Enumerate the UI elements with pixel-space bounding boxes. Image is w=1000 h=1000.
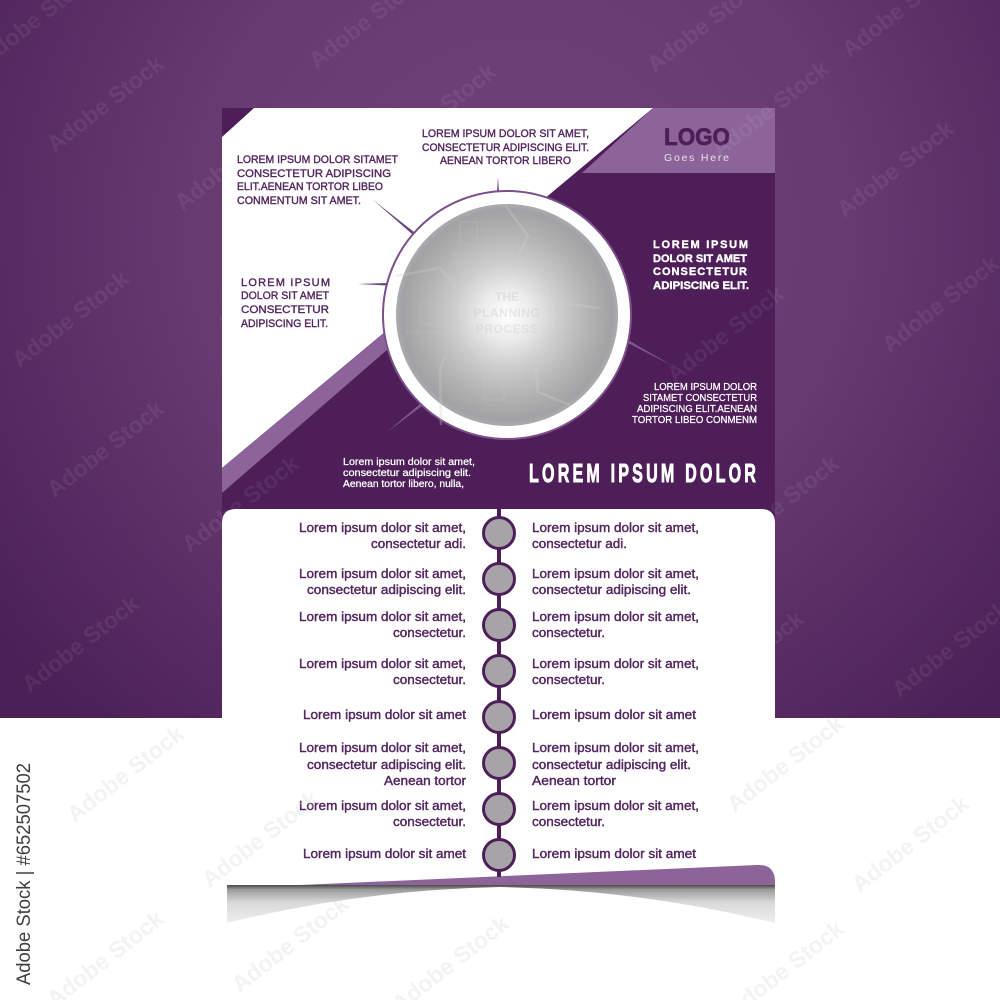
logo band xyxy=(582,108,775,173)
callout: right bold: ADIPISCING ELIT. xyxy=(653,280,749,292)
list: right column: Lorem ipsum dolor sit amet xyxy=(532,707,696,722)
callout: top centre: LOREM IPSUM DOLOR SIT AMET, xyxy=(422,128,589,140)
list: left column: Lorem ipsum dolor sit amet xyxy=(303,707,466,722)
list: right column: Lorem ipsum dolor sit amet, xyxy=(532,798,699,813)
white list panel xyxy=(222,509,775,885)
faint process diagram: MANAGEMENT xyxy=(451,259,491,265)
callout: top centre xyxy=(422,128,589,167)
list: left column: Lorem ipsum dolor sit amet, xyxy=(299,798,466,813)
stock watermark repeated: Adobe Stock xyxy=(832,115,959,222)
faint process diagram: ESTATE & LEGACY xyxy=(405,330,455,336)
light purple diagonal stripe xyxy=(222,328,395,493)
callout: lower centre: Aenean tortor libero, nulla, xyxy=(343,479,464,490)
list: left column: Lorem ipsum dolor sit amet, xyxy=(299,520,466,535)
callout: middle left: CONSECTETUR xyxy=(241,304,329,316)
stock watermark repeated: Adobe Stock xyxy=(722,710,849,817)
heading: LOREM IPSUM DOLOR xyxy=(529,458,756,488)
logo xyxy=(664,124,730,164)
stock watermark repeated: Adobe Stock xyxy=(877,250,1000,357)
stock watermark repeated: Adobe Stock xyxy=(662,280,789,387)
faint process diagram: INVESTMENT xyxy=(453,252,489,258)
callout: lower right: ADIPISCING ELIT.AENEAN xyxy=(637,404,757,415)
grey orb xyxy=(396,204,618,426)
list: left column: Lorem ipsum dolor sit amet xyxy=(303,846,466,861)
callout spokes xyxy=(358,177,673,432)
stock watermark repeated: Adobe Stock xyxy=(177,450,304,557)
stock watermark repeated: Adobe Stock xyxy=(707,55,834,162)
stock watermark repeated: Adobe Stock xyxy=(42,395,169,502)
list: left column xyxy=(299,520,467,861)
stock watermark repeated: Adobe Stock xyxy=(847,790,974,897)
callout: lower right: TORTOR LIBEO CONMENM xyxy=(632,415,757,426)
faint process diagram: THE xyxy=(495,290,519,304)
callout: lower centre xyxy=(343,457,475,490)
list: left column: Lorem ipsum dolor sit amet, xyxy=(299,609,466,624)
list: right column: consectetur. xyxy=(532,625,605,640)
list: right column xyxy=(532,520,699,861)
timeline xyxy=(484,509,514,877)
white diagonal area xyxy=(222,108,653,468)
list: right column: consectetur adipiscing elit. xyxy=(532,757,691,772)
list: right column: Lorem ipsum dolor sit amet xyxy=(532,846,696,861)
stock watermark repeated: Adobe Stock xyxy=(374,58,501,165)
central circle xyxy=(383,191,631,439)
list: right column: consectetur. xyxy=(532,814,605,829)
callout: lower centre: consectetur adipiscing elit. xyxy=(343,468,471,479)
list: left column: Lorem ipsum dolor sit amet, xyxy=(299,566,466,581)
stock watermark repeated: Adobe Stock xyxy=(62,720,189,827)
list: left column: consectetur adipiscing elit. xyxy=(307,757,466,772)
list: right column: Lorem ipsum dolor sit amet, xyxy=(532,520,699,535)
callout: right bold xyxy=(653,239,749,292)
callout: lower centre: Lorem ipsum dolor sit amet, xyxy=(343,457,475,468)
list: left column: consectetur adi. xyxy=(371,536,466,551)
callout: upper left xyxy=(237,154,398,207)
callout: lower right xyxy=(632,382,757,426)
timeline nodes xyxy=(484,518,514,870)
faint process diagram: PLANNING xyxy=(474,306,540,320)
list: left column: Aenean tortor xyxy=(384,773,467,788)
callout: right bold: DOLOR SIT AMET xyxy=(653,253,747,265)
callout: lower right: SITAMET CONSECTETUR xyxy=(643,393,757,404)
list: right column: Lorem ipsum dolor sit amet, xyxy=(532,656,699,671)
callout: upper left: CONSECTETUR ADIPISCING xyxy=(237,168,391,180)
bottom purple wedge xyxy=(300,865,775,885)
callout: upper left: ELIT.AENEAN TORTOR LIBEO xyxy=(237,181,383,193)
list: right column: Lorem ipsum dolor sit amet, xyxy=(532,609,699,624)
list: right column: Aenean tortor xyxy=(532,773,617,788)
stock watermark repeated: Adobe Stock xyxy=(42,50,169,157)
callout: upper left: LOREM IPSUM DOLOR SITAMET xyxy=(237,154,398,166)
drop shadow below flyer xyxy=(227,885,775,923)
stock watermark repeated: Adobe Stock xyxy=(170,108,297,215)
list: left column: consectetur. xyxy=(393,672,466,687)
stock watermark repeated: Adobe Stock xyxy=(227,890,354,997)
callout: lower right: LOREM IPSUM DOLOR xyxy=(654,382,757,393)
stock watermark repeated: Adobe Stock xyxy=(717,450,844,557)
logo: LOGO xyxy=(664,124,730,151)
list: left column: consectetur. xyxy=(393,625,466,640)
stock watermark repeated: Adobe Stock xyxy=(212,230,339,337)
list: right column: consectetur adipiscing elit. xyxy=(532,582,691,597)
callout: middle left: DOLOR SIT AMET xyxy=(241,290,329,302)
logo: Goes Here xyxy=(664,152,729,164)
stock watermark repeated: Adobe Stock xyxy=(17,590,144,697)
list: left column: Lorem ipsum dolor sit amet, xyxy=(299,656,466,671)
list: left column: Lorem ipsum dolor sit amet, xyxy=(299,740,466,755)
callout: top centre: AENEAN TORTOR LIBERO xyxy=(440,155,571,167)
faint process diagram: PROCESS xyxy=(476,322,538,336)
list: right column: consectetur. xyxy=(532,672,605,687)
flyer top panel xyxy=(222,108,775,528)
stock watermark repeated: Adobe Stock xyxy=(197,785,324,892)
list: right column: Lorem ipsum dolor sit amet, xyxy=(532,566,699,581)
stock watermark repeated: Adobe Stock xyxy=(7,265,134,372)
stock id side label: Adobe Stock | #652507502 xyxy=(14,763,35,985)
purple background band xyxy=(0,0,1000,718)
list: left column: consectetur. xyxy=(393,814,466,829)
callout: right bold: CONSECTETUR xyxy=(653,266,747,278)
list: left column: consectetur adipiscing elit. xyxy=(307,582,466,597)
list: right column: Lorem ipsum dolor sit amet, xyxy=(532,740,699,755)
faint process diagram xyxy=(396,205,600,425)
callout: top centre: CONSECTETUR ADIPISCING ELIT. xyxy=(422,142,589,154)
list: right column: consectetur adi. xyxy=(532,536,627,551)
callout: middle left: LOREM IPSUM xyxy=(241,277,330,289)
callout: right bold: LOREM IPSUM xyxy=(653,239,748,251)
callout: middle left: ADIPISCING ELIT. xyxy=(241,318,328,330)
callout: upper left: CONMENTUM SIT AMET. xyxy=(237,195,361,207)
callout: middle left xyxy=(241,277,330,330)
stock watermark repeated: Adobe Stock xyxy=(682,605,809,712)
